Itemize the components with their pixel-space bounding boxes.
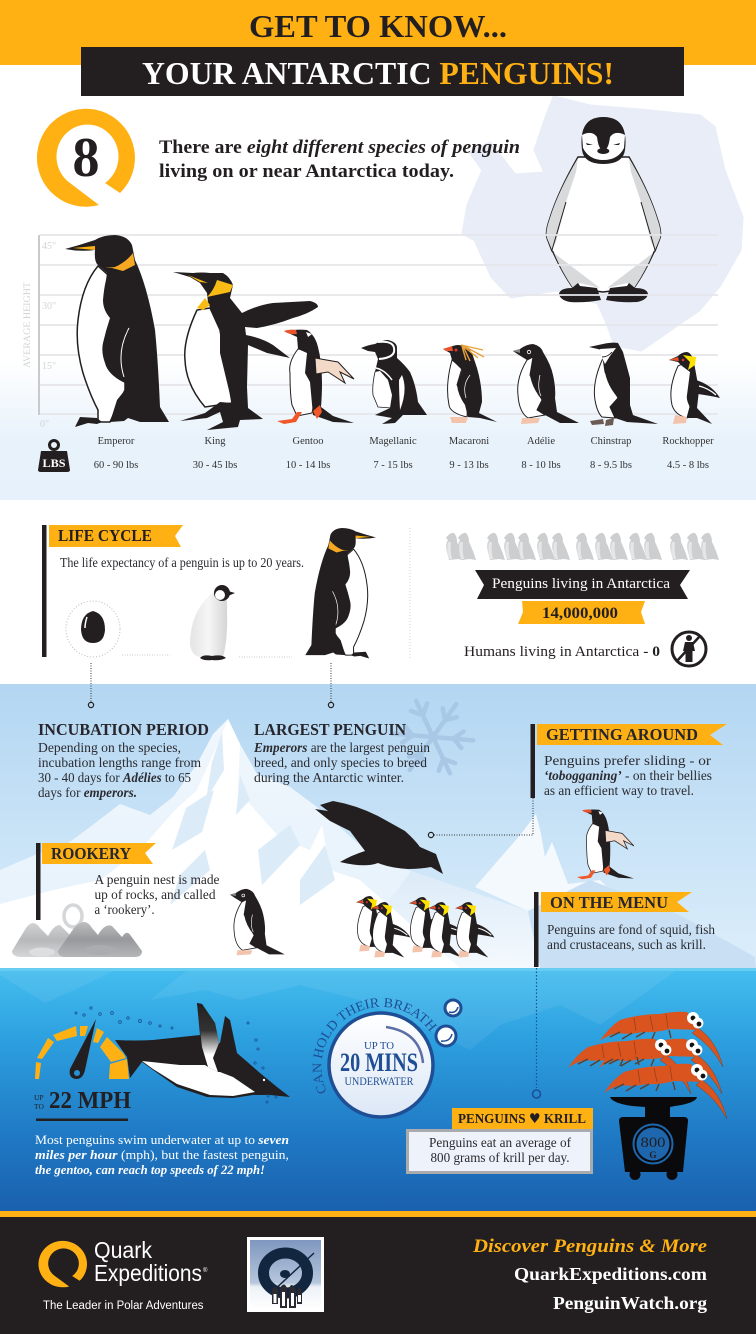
life cycle ribbon: LIFE CYCLE	[58, 526, 152, 545]
species weights: Macaroni	[449, 436, 489, 447]
life cycle panel	[42, 525, 376, 660]
incubation period text: INCUBATION PERIOD	[38, 720, 209, 739]
intro statement	[159, 138, 520, 182]
penguin count ribbon: 14,000,000	[542, 605, 618, 622]
penguins love krill callout	[408, 1108, 593, 1172]
adelie penguin	[230, 889, 285, 955]
getting around panel: GETTING AROUND	[546, 725, 698, 744]
water bubbles trail	[75, 1007, 277, 1103]
krill on scale	[568, 1012, 727, 1119]
column divider	[409, 528, 411, 660]
incubation period text	[38, 720, 209, 800]
species weights: Adélie	[527, 436, 555, 447]
penguin watch badge	[247, 1237, 324, 1312]
largest penguin text: during the Antarctic winter.	[254, 770, 404, 785]
rookery panel: a ‘rookery’.	[94, 902, 154, 917]
species weights: 9 - 13 lbs	[449, 460, 489, 471]
Quark Expeditions logo: ®	[203, 1267, 208, 1274]
egg	[66, 601, 120, 657]
icon: no humans	[672, 632, 706, 666]
on the menu panel	[534, 892, 715, 967]
grey penguin population row	[446, 533, 719, 560]
incubation period text: days for emperors.	[38, 785, 137, 800]
on the menu panel: and crustaceans, such as krill.	[547, 937, 706, 952]
swim speed text: miles per hour (mph), but the fastest penguin,	[35, 1147, 289, 1162]
Quark Expeditions logo: Quark	[94, 1237, 152, 1263]
height chart axis and gridlines: 15"	[42, 361, 56, 372]
rookery panel: up of rocks, and called	[94, 887, 216, 902]
humans statement: Humans living in Antarctica - 0	[464, 644, 660, 660]
connector: tobogganing	[428, 798, 533, 838]
Quark Expeditions logo: The Leader in Polar Adventures	[43, 1300, 204, 1312]
breath hold circle: CAN HOLD THEIR BREATH	[312, 998, 437, 1094]
icy blue sky section	[0, 684, 756, 969]
snowy mountains	[0, 719, 756, 968]
on the menu panel: Penguins are fond of squid, fish	[547, 922, 715, 937]
breath hold circle: UNDERWATER	[344, 1076, 414, 1088]
connector: egg to incubation	[88, 663, 94, 708]
population ribbon: Penguins living in Antarctica	[492, 576, 670, 592]
rookery panel	[36, 843, 220, 920]
kitchen scale	[610, 1097, 697, 1180]
penguins love krill callout: 800 grams of krill per day.	[430, 1150, 570, 1165]
species weights: 8 - 9.5 lbs	[590, 460, 632, 471]
22 mph heading	[34, 1088, 131, 1121]
call to action links	[472, 1236, 708, 1313]
getting around panel: as an efficient way to travel.	[544, 783, 694, 798]
ocean section	[0, 968, 756, 1212]
species weights: Rockhopper	[662, 436, 714, 447]
snowflake	[384, 686, 482, 788]
swim speed text: the gentoo, can reach top speeds of 22 mph!	[35, 1162, 265, 1177]
breath hold circle: 20 MINS	[340, 1048, 418, 1077]
kitchen scale: 800	[640, 1135, 666, 1151]
species weights: 7 - 15 lbs	[373, 460, 413, 471]
breath hold circle: UP TO	[364, 1040, 394, 1052]
getting around panel: Penguins prefer sliding - or	[544, 753, 712, 768]
gentoo penguin tobogganing	[577, 809, 634, 879]
penguin: chinstrap	[589, 343, 658, 426]
getting around panel	[530, 724, 727, 798]
rockhopper group	[356, 896, 494, 957]
largest penguin text: LARGEST PENGUIN	[254, 720, 406, 739]
species weights: 10 - 14 lbs	[286, 460, 330, 471]
species weights	[38, 436, 714, 472]
call to action links: PenguinWatch.org	[553, 1293, 707, 1313]
footer	[0, 1211, 756, 1334]
on the menu panel: ON THE MENU	[550, 893, 668, 912]
Quark Expeditions logo: Expeditions	[94, 1260, 202, 1286]
breath bubbles	[436, 1000, 461, 1046]
penguin: adelie	[513, 344, 579, 424]
largest penguin text: Emperors are the largest penguin	[253, 740, 430, 755]
species weights: 30 - 45 lbs	[193, 460, 237, 471]
species weights: Magellanic	[369, 436, 417, 447]
rock nest	[12, 905, 142, 957]
kitchen scale: G	[649, 1151, 657, 1161]
22 mph heading: UP	[34, 1093, 44, 1102]
22 mph heading: 22 MPH	[49, 1088, 131, 1114]
Quark Expeditions logo	[38, 1237, 208, 1312]
22 mph heading: TO	[34, 1102, 44, 1111]
swimming gentoo penguin	[115, 1003, 290, 1098]
penguins love krill callout: PENGUINS ♥ KRILL	[458, 1111, 586, 1127]
height chart axis and gridlines: 45"	[42, 241, 56, 252]
penguin: gentoo	[277, 330, 354, 424]
penguin: emperor	[65, 235, 169, 427]
emperor penguin front view	[546, 117, 661, 302]
height chart axis and gridlines: AVERAGE HEIGHT	[23, 282, 33, 368]
species weights: 60 - 90 lbs	[94, 460, 138, 471]
species weights: King	[204, 436, 226, 447]
chick	[190, 585, 235, 660]
call to action links: QuarkExpeditions.com	[514, 1264, 707, 1284]
penguin: magellanic	[361, 340, 427, 424]
intro statement: living on or near Antarctica today.	[159, 162, 454, 182]
species weights: LBS	[42, 456, 66, 470]
icon: Q logo with number 8: 8	[72, 127, 100, 189]
population ribbon	[475, 570, 690, 599]
page background: white upper section	[0, 0, 756, 500]
largest penguin text	[253, 720, 430, 785]
getting around panel: ‘tobogganing’ - on their bellies	[544, 768, 712, 783]
swim speed text: Most penguins swim underwater at up to seven	[35, 1132, 289, 1147]
penguin: king	[173, 272, 318, 430]
adult emperor penguin	[305, 528, 376, 659]
incubation period text: incubation lengths range from	[38, 755, 202, 770]
title banner: YOUR ANTARCTIC PENGUINS!	[142, 55, 614, 91]
tobogganing penguin silhouette	[315, 801, 443, 874]
species weights: 4.5 - 8 lbs	[667, 460, 709, 471]
height chart axis and gridlines	[23, 235, 718, 430]
title banner	[0, 0, 756, 96]
intro statement: There are eight different species of penguin	[159, 138, 520, 158]
Antarctica map silhouette	[463, 97, 742, 350]
incubation period text: 30 - 40 days for Adélies to 65	[38, 770, 191, 785]
penguin: macaroni	[443, 345, 497, 423]
icon: Q logo with number 8	[37, 109, 135, 207]
species weights: Emperor	[98, 436, 135, 447]
species weights: Chinstrap	[591, 436, 631, 447]
penguin: rockhopper	[669, 352, 720, 424]
swim speed text	[35, 1132, 289, 1177]
penguin count ribbon	[518, 601, 645, 624]
rookery panel: A penguin nest is made	[94, 872, 220, 887]
life cycle ribbon	[49, 525, 183, 547]
title banner: GET TO KNOW...	[249, 8, 507, 44]
connector: on the menu to krill	[532, 968, 540, 1098]
dotted growth lines	[122, 655, 292, 657]
largest penguin text: breed, and only species to breed	[254, 755, 427, 770]
penguins love krill callout: Penguins eat an average of	[429, 1135, 572, 1150]
incubation period text: Depending on the species,	[38, 740, 181, 755]
call to action links: Discover Penguins & More	[472, 1236, 708, 1257]
height chart axis and gridlines: 30"	[42, 301, 56, 312]
species weights: 8 - 10 lbs	[521, 460, 561, 471]
speed gauge	[35, 1019, 129, 1079]
species weights: Gentoo	[293, 436, 323, 447]
rookery panel: ROOKERY	[51, 844, 131, 863]
life expectancy text: The life expectancy of a penguin is up to 20 years.	[60, 555, 304, 570]
height chart axis and gridlines: 0"	[40, 419, 49, 430]
connector: adult to largest penguin	[328, 663, 334, 708]
